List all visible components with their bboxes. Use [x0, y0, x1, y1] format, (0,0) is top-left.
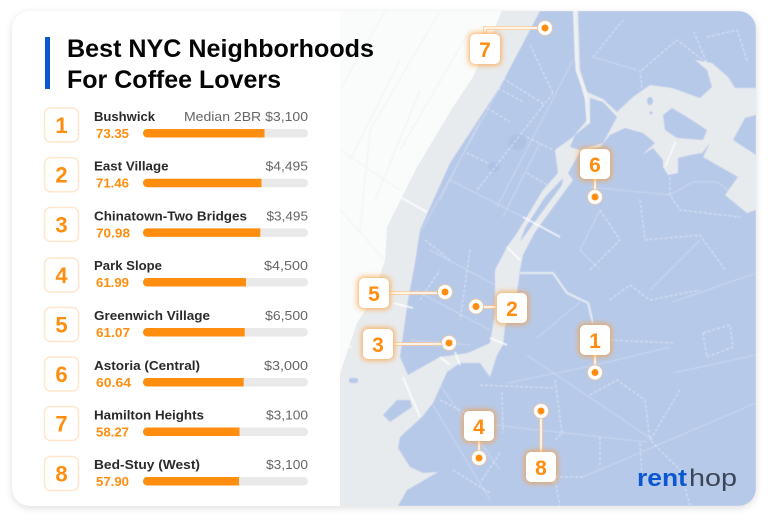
row 1: 73.35	[96, 127, 129, 141]
row 8: 8	[55, 462, 68, 486]
marker 7: 7	[479, 39, 491, 62]
row 4: 4	[55, 263, 68, 288]
title accent bar	[45, 37, 50, 89]
row 6	[44, 357, 308, 391]
row 4	[44, 258, 308, 292]
streets	[410, 57, 756, 500]
row 8: Bed-Stuy (West)	[94, 457, 200, 472]
row 1: Median 2BR $3,100	[184, 109, 308, 124]
row 7: Hamilton Heights	[94, 408, 204, 422]
row 2: 2	[55, 163, 68, 188]
marker 1: 1	[589, 330, 601, 353]
row 3: 3	[55, 212, 68, 237]
row 2: $4,495	[266, 159, 308, 174]
marker 1	[579, 324, 611, 380]
row 7: $3,100	[266, 408, 308, 422]
row 1	[44, 108, 308, 142]
row 1: Bushwick	[94, 109, 156, 124]
row 1: 1	[55, 113, 68, 138]
marker 8	[525, 404, 557, 483]
panel: ranking list	[12, 11, 374, 506]
row 4: Park Slope	[94, 258, 162, 273]
marker 5	[358, 277, 452, 309]
row 6: Astoria (Central)	[94, 358, 200, 373]
row 2: 71.46	[96, 177, 129, 191]
row 7: 7	[55, 412, 68, 436]
row 8: $3,100	[266, 457, 308, 472]
title: For Coffee Lovers	[67, 66, 281, 94]
row 5: 5	[55, 312, 68, 338]
marker 4: 4	[473, 416, 485, 439]
row 8: 57.90	[96, 475, 129, 489]
row 6: 6	[55, 362, 68, 387]
logo: renthop: rent	[637, 465, 687, 492]
row 5: $6,500	[265, 308, 308, 323]
marker 6	[579, 148, 611, 204]
row 4: $4,500	[264, 258, 308, 273]
marker 4	[463, 410, 495, 466]
logo: renthop: hop	[689, 465, 737, 492]
row 3	[44, 207, 308, 241]
marker 5: 5	[368, 283, 380, 306]
row 8	[44, 456, 308, 490]
panel: map	[340, 11, 756, 506]
row 3: Chinatown-Two Bridges	[94, 208, 247, 223]
row 5: 61.07	[96, 326, 130, 340]
row 3: 70.98	[96, 226, 130, 240]
row 2	[44, 158, 308, 192]
marker 6: 6	[589, 154, 601, 177]
New Jersey land	[340, 11, 502, 373]
row 6: 60.64	[96, 376, 131, 390]
marker 2	[468, 292, 528, 324]
row 7: 58.27	[96, 426, 129, 440]
row 5	[44, 308, 308, 342]
row 2: East Village	[94, 159, 168, 174]
row 5: Greenwich Village	[94, 308, 210, 323]
marker 3: 3	[372, 334, 384, 357]
marker 7	[469, 20, 552, 65]
row 4: 61.99	[96, 276, 129, 290]
row 7	[44, 406, 308, 440]
marker 3	[362, 328, 456, 360]
row 3: $3,495	[266, 208, 308, 223]
title	[68, 39, 373, 88]
title: Best NYC Neighborhoods	[67, 35, 374, 63]
logo: renthop	[637, 465, 737, 492]
row 6: $3,000	[264, 358, 308, 373]
boroughs	[349, 11, 756, 506]
marker 2: 2	[506, 298, 518, 321]
marker 8: 8	[535, 457, 547, 480]
